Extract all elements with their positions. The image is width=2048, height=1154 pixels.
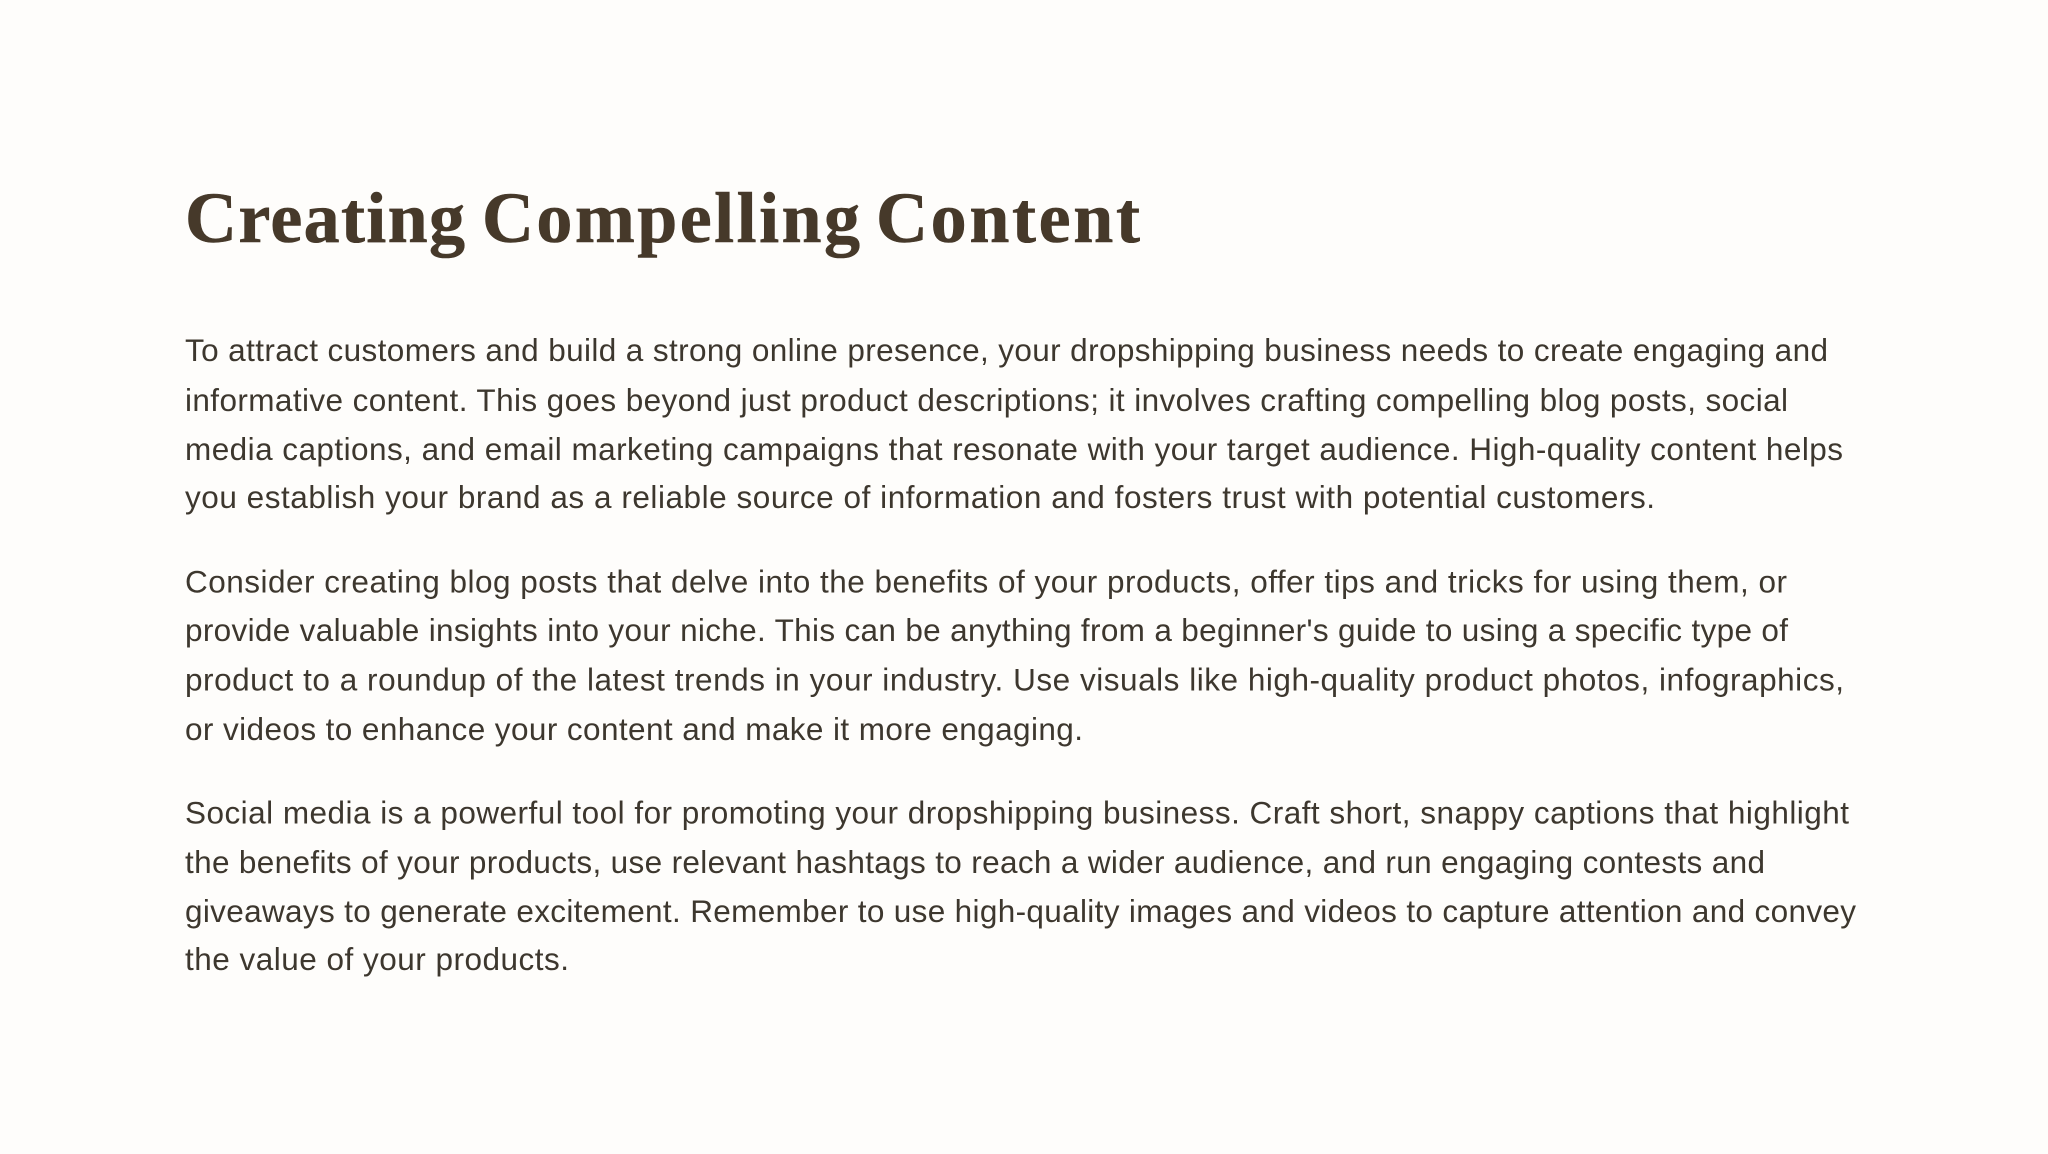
text block: paragraph 2: or videos to enhance your content and make it more engaging. [185, 711, 1083, 747]
text block: paragraph 1: you establish your brand as a reliable source of information and fosters trust with potential customers. [185, 479, 1655, 515]
title: Compelling [482, 178, 860, 258]
text block: paragraph 1: To attract customers and build a strong online presence, your dropshipping business needs to create engaging and [185, 332, 1828, 368]
text block: paragraph 2: provide valuable insights into your niche. This can be anything from a beginner's guide to using a specific type of [185, 612, 1788, 648]
text block: paragraph 3: the value of your products. [185, 941, 569, 977]
text block: paragraph 3: the benefits of your products, use relevant hashtags to reach a wider audience, and run engaging contests and [185, 844, 1765, 880]
text block: paragraph 2: Consider creating blog posts that delve into the benefits of your products, offer tips and tricks for using them, or [185, 564, 1787, 600]
text block: paragraph 1: media captions, and email marketing campaigns that resonate with your target audience. High-quality content helps [185, 431, 1843, 467]
text block: paragraph 3: giveaways to generate excitement. Remember to use high-quality images and videos to capture attention and convey [185, 893, 1856, 929]
text block: paragraph 3 [185, 794, 1856, 977]
title: Content [876, 178, 1140, 258]
text block: paragraph 1 [185, 332, 1843, 515]
title: Creating [185, 178, 465, 258]
text block: paragraph 1: informative content. This goes beyond just product descriptions; it involves crafting compelling blog posts, social [185, 382, 1788, 418]
text block: paragraph 2 [185, 564, 1844, 747]
text block: paragraph 3: Social media is a powerful tool for promoting your dropshipping business. Craft short, snappy captions that highlight [185, 794, 1849, 830]
title [185, 178, 1140, 258]
text block: paragraph 2: product to a roundup of the latest trends in your industry. Use visuals like high-quality product photos, infographics, [185, 662, 1844, 698]
